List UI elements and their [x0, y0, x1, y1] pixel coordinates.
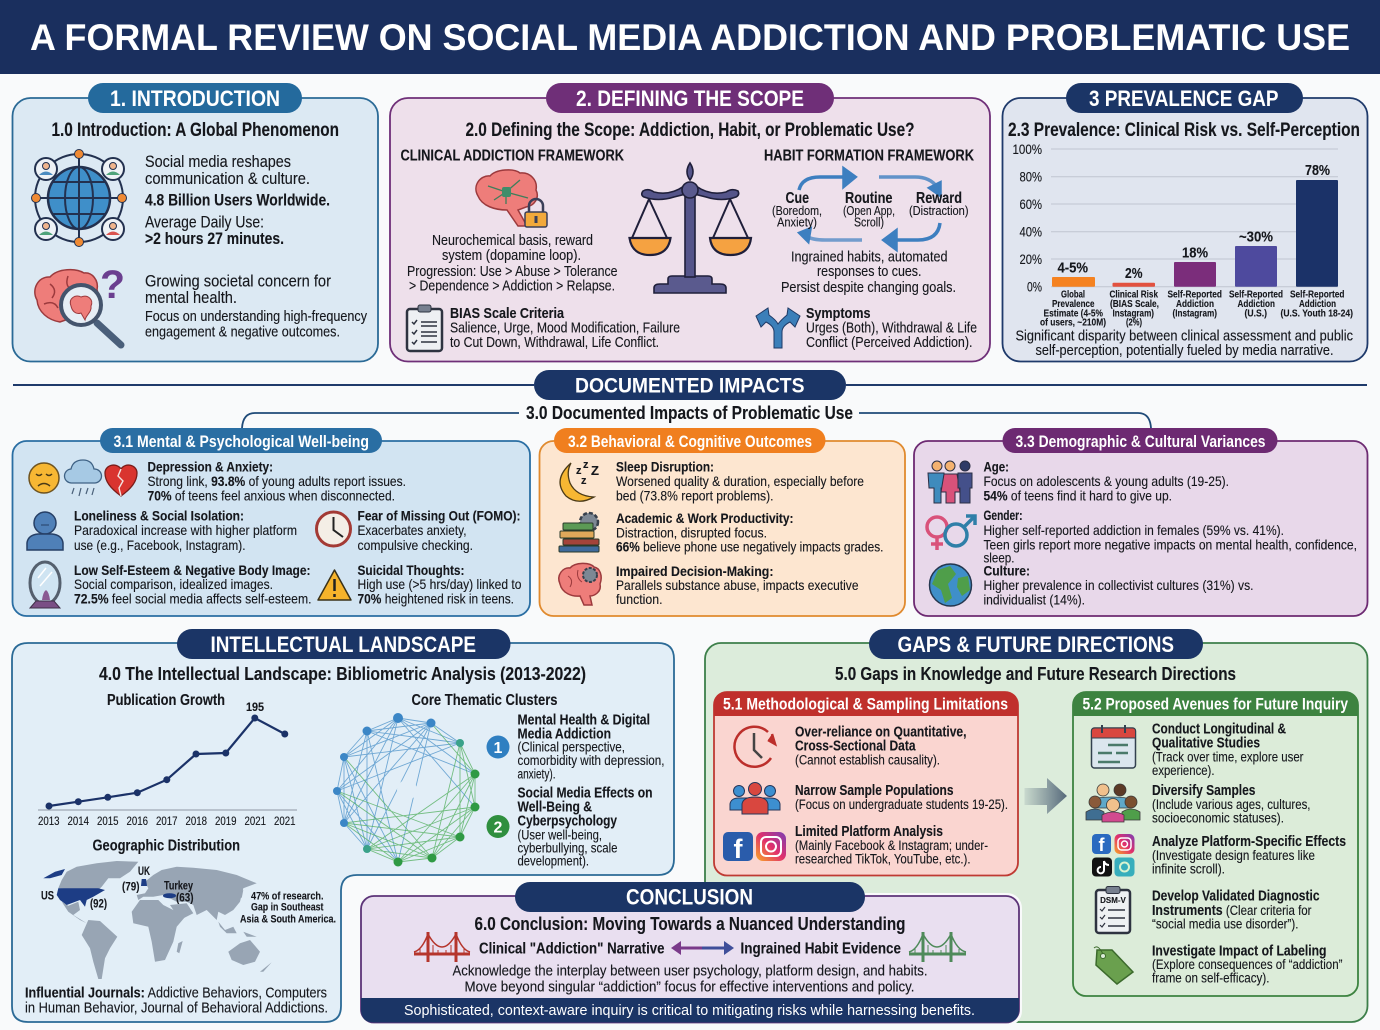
world map: geographic distribution: 47% of research. [251, 890, 324, 902]
text: age gender culture: Age: [984, 458, 1009, 474]
pill heading: intellectual landscape: INTELLECTUAL LANDSCAPE [210, 632, 476, 657]
text: diversify samples: Diversify Samples [1152, 783, 1256, 799]
text: over-reliance: Cross-Sectional Data [795, 738, 916, 754]
text: users and daily use: communication & culture. [145, 170, 310, 188]
heading: gaps in knowledge: 5.0 Gaps in Knowledge and Future Research Directions [835, 663, 1236, 684]
bar chart: prevalence: 78% [1305, 163, 1330, 179]
icon: moon and z's [560, 459, 599, 501]
text: clinical addiction narrative: Clinical "Addiction" Narrative [479, 940, 665, 958]
text: cluster 2: development). [518, 854, 589, 868]
banner: closing statement [361, 998, 1019, 1022]
heading: documented impacts of problematic use: 3.0 Documented Impacts of Problematic Use [526, 403, 853, 423]
world map: geographic distribution: (63) [176, 892, 194, 904]
line chart: publication growth: 2021 [274, 816, 296, 828]
icon: moon and z's: z [583, 459, 589, 471]
text: societal concern: mental health. [145, 289, 237, 307]
text: cluster 1: Mental Health & Digital [518, 712, 650, 728]
text: impact of labeling: (Explore consequences of “addiction” [1152, 957, 1342, 972]
bar chart: prevalence: Addiction [1299, 298, 1336, 310]
text: cluster 2 [518, 786, 652, 868]
world map: geographic distribution: (92) [90, 898, 107, 910]
text: diagnostic instruments: Develop Validated Diagnostic [1152, 888, 1320, 904]
banner: closing statement: Sophisticated, context-aware inquiry is critical to mitigating risks while harnessing benefits. [404, 1002, 975, 1019]
icon: three people [928, 461, 972, 503]
header: 5.1 [714, 692, 1018, 716]
bar chart: prevalence: Self-Reported [1229, 289, 1283, 301]
badge: cluster 2: 2 [494, 820, 503, 836]
line chart: publication growth: 2015 [97, 816, 118, 828]
badge: cluster 1 [486, 736, 510, 758]
text: longitudinal [1152, 722, 1304, 778]
bar chart: prevalence: Self-Reported [1290, 289, 1344, 301]
panel: defining the scope [390, 83, 990, 362]
text: behavioral outcomes: Sleep Disruption: [616, 458, 714, 474]
text: loneliness: use (e.g., Facebook, Instagram). [74, 537, 246, 553]
icon: broken heart [105, 465, 137, 496]
text: users and daily use: 4.8 Billion Users Worldwide. [145, 192, 330, 210]
line chart: publication growth: 2017 [156, 816, 178, 828]
icon: lonely person [27, 512, 63, 550]
bar chart: prevalence: 60% [1020, 197, 1042, 212]
arrow: double-headed narrative to evidence [671, 941, 734, 955]
text: ingrained habit evidence: Ingrained Habit Evidence [740, 940, 901, 958]
text: narrow sample: (Focus on undergraduate students 19-25). [795, 797, 1008, 812]
text: loneliness: Loneliness & Social Isolation: [74, 508, 244, 524]
icon: diverse group [1086, 784, 1140, 822]
pill heading: 3.3 [1002, 428, 1278, 453]
text: cluster 1: comorbidity with depression, [518, 753, 664, 768]
pill heading: documented impacts [534, 370, 846, 400]
bar chart: prevalence: Clinical Risk [1110, 289, 1158, 301]
text: behavioral outcomes: Distraction, disrupted focus. [616, 524, 767, 540]
text: cluster 1: Media Addiction [518, 726, 611, 742]
bar chart: prevalence: 80% [1020, 170, 1042, 184]
text: symptoms: Conflict (Perceived Addiction). [806, 335, 972, 351]
title banner [0, 0, 1380, 74]
text: fomo: Fear of Missing Out (FOMO): [358, 508, 520, 524]
icon: group of people [730, 782, 780, 814]
bar chart: prevalence: 40% [1020, 224, 1042, 240]
text: users and daily use [145, 153, 330, 248]
text: self-esteem: 72.5% feel social media affects self-esteem. [74, 590, 312, 606]
bar chart: prevalence: 18% [1182, 246, 1208, 262]
bar chart: prevalence: of users, ~210M) [1040, 317, 1106, 329]
text: clinical framework description: system (dopamine loop). [442, 248, 581, 264]
text: conclusion body: Move beyond singular “addiction” focus for effective interventions and policy. [464, 980, 914, 996]
text: cluster 2: (User well-being, [518, 828, 602, 842]
heading: clinical addiction framework: CLINICAL ADDICTION FRAMEWORK [400, 148, 625, 164]
text: impact of labeling: frame on self-efficacy). [1152, 970, 1270, 986]
icon: mirror [30, 562, 60, 608]
text: diagnostic instruments: Instruments (Clear criteria for [1152, 903, 1312, 919]
bar chart: prevalence: (BIAS Scale, [1110, 298, 1159, 310]
text: self-esteem: Social comparison, idealized images. [74, 576, 273, 592]
icon: facebook [723, 832, 753, 864]
text: behavioral outcomes: Impaired Decision-Making: [616, 563, 774, 579]
heading: addiction habit problematic use: 2.0 Defining the Scope: Addiction, Habit, or Problematic Use? [466, 120, 914, 141]
bar chart: prevalence: (2%) [1126, 317, 1142, 329]
text: influential journals [25, 986, 328, 1016]
text: suicidal thoughts [358, 562, 522, 606]
text: cluster 1: anxiety). [518, 766, 556, 782]
icon: balance scale [630, 163, 751, 293]
panel: conclusion [358, 882, 1022, 1026]
text: cluster 2: Cyberpsychology [518, 814, 617, 830]
text: suicidal thoughts: Suicidal Thoughts: [358, 562, 464, 578]
pill heading: 1. introduction: 1. INTRODUCTION [110, 86, 280, 111]
icon: gender symbols [927, 516, 975, 550]
pill heading: 3.1: 3.1 Mental & Psychological Well-being [114, 433, 369, 451]
panel: gaps and future directions [705, 629, 1368, 1022]
icon: clock with return arrow [734, 727, 775, 767]
text: clinical framework description: > Dependence > Addiction > Relapse. [409, 278, 615, 294]
text: depression and anxiety: 70% of teens feel anxious when disconnected. [148, 488, 395, 504]
icon: moon and z's: z [581, 475, 587, 487]
pill heading: conclusion [515, 882, 865, 912]
text: fomo [358, 508, 520, 553]
heading: nuanced understanding: 6.0 Conclusion: Moving Towards a Nuanced Understanding [474, 913, 906, 934]
text: cue routine reward: (Distraction) [909, 204, 968, 218]
icon: brain with gear [559, 563, 601, 605]
text: behavioral outcomes: Worsened quality & duration, especially before [616, 473, 864, 489]
text: clinical framework description [407, 233, 618, 294]
text: diversify samples: (Include various ages, cultures, [1152, 797, 1310, 812]
bar chart: prevalence: (Instagram) [1172, 307, 1217, 319]
bar chart: prevalence: (U.S.) [1244, 307, 1267, 319]
text: over-reliance [795, 724, 966, 768]
text: bias scale criteria: to Cut Down, Withdrawal, Life Conflict. [450, 335, 659, 351]
text: symptoms: Symptoms [806, 305, 870, 322]
text: societal concern: Growing societal concern for [145, 272, 331, 290]
text: impact of labeling: Investigate Impact of Labeling [1152, 944, 1326, 960]
text: habit description [781, 250, 956, 296]
bar chart: prevalence: Addiction [1238, 298, 1275, 310]
line chart: publication growth [38, 692, 297, 828]
line chart: publication growth: 2013 [38, 816, 60, 828]
text: conclusion body: Acknowledge the interplay between user psychology, platform design, and habits. [452, 964, 928, 980]
text: cue routine reward: Anxiety) [777, 216, 817, 230]
world map: geographic distribution: Gap in Southeast [251, 902, 324, 914]
text: cluster 2: Well-Being & [518, 800, 592, 816]
heading: geographic distribution: Geographic Distribution [92, 838, 240, 854]
pill heading: 3.1 [100, 428, 382, 453]
text: cue routine reward: Routine [845, 190, 893, 207]
arrow: limitations to avenues [1024, 778, 1067, 814]
icon: tag [1094, 947, 1133, 984]
icon: brain under magnifier with question mark: ? [100, 263, 125, 307]
icon: moon and z's: z [576, 465, 582, 477]
icon: platform apps: f [1098, 835, 1106, 855]
text: depression and anxiety [148, 458, 406, 504]
icon: earth [930, 564, 972, 606]
text: impact of labeling [1152, 944, 1342, 986]
bar chart: prevalence: 20% [1020, 252, 1042, 267]
text: diversify samples [1152, 783, 1310, 826]
panel: mental and psychological well-being [12, 428, 530, 616]
icon: calendar with arrows [1092, 725, 1136, 768]
text: loneliness [74, 508, 297, 553]
text: narrow sample: Narrow Sample Populations [795, 783, 954, 799]
panel: prevalence gap [1002, 83, 1368, 362]
bar chart: prevalence: 4-5% [1058, 260, 1088, 276]
text: bias scale criteria: BIAS Scale Criteria [450, 305, 565, 322]
text: longitudinal: Qualitative Studies [1152, 736, 1260, 752]
bar chart: prevalence: Instagram) [1112, 307, 1154, 319]
text: age gender culture: Focus on adolescents & young adults (19-25). [984, 473, 1229, 489]
text: age gender culture: individualist (14%). [984, 592, 1085, 608]
text: diagnostic instruments: “social media use disorder”). [1152, 916, 1298, 932]
text: societal concern: engagement & negative outcomes. [145, 324, 340, 340]
text: societal concern: Focus on understanding high-frequency [145, 309, 368, 325]
line chart: publication growth: 195 [246, 702, 265, 714]
world map: geographic distribution: Asia & South America. [240, 913, 336, 925]
bar chart: prevalence: 100% [1012, 142, 1042, 157]
pill heading: conclusion: CONCLUSION [626, 884, 753, 910]
text: behavioral outcomes: bed (73.8% report problems). [616, 488, 774, 504]
heading: habit formation framework: HABIT FORMATION FRAMEWORK [764, 148, 975, 164]
text: cue routine reward: (Open App, [843, 204, 895, 218]
text: users and daily use: Social media reshapes [145, 153, 291, 171]
text: cluster 2: Social Media Effects on [518, 786, 652, 802]
text: societal concern [145, 272, 368, 340]
text: platform-specific effects: Analyze Platform-Specific Effects [1152, 834, 1346, 850]
panel: behavioral and cognitive outcomes [540, 428, 905, 616]
icon: split arrow [756, 308, 800, 348]
pill heading: gaps and future directions: GAPS & FUTURE DIRECTIONS [898, 632, 1174, 657]
icon: clipboard checklist [407, 305, 442, 351]
text: longitudinal: (Track over time, explore user [1152, 750, 1304, 764]
panel: introduction [12, 83, 378, 362]
text: symptoms: Urges (Both), Withdrawal & Life [806, 320, 977, 336]
text: cluster 1 [518, 712, 664, 782]
text: loneliness: Paradoxical increase with higher platform [74, 522, 297, 538]
bar chart: prevalence: Global [1061, 289, 1085, 301]
text: habit description: Ingrained habits, automated [791, 250, 948, 266]
text: conclusion body [452, 964, 928, 996]
line chart: publication growth: 2016 [126, 816, 148, 828]
icon: green bridge [909, 932, 966, 962]
text: users and daily use: >2 hours 27 minutes. [145, 230, 284, 248]
bar chart: prevalence: Self-Reported [1168, 289, 1222, 301]
text: behavioral outcomes: function. [616, 591, 662, 607]
header: 5.2 [1073, 692, 1358, 716]
text: age gender culture: Culture: [984, 562, 1030, 578]
pill heading: 3.2: 3.2 Behavioral & Cognitive Outcomes [568, 433, 812, 451]
pill heading: defining the scope: 2. DEFINING THE SCOPE [576, 86, 804, 111]
text: diagnostic instruments [1152, 888, 1320, 932]
text: symptoms [806, 305, 977, 351]
text: depression and anxiety: Depression & Anxiety: [148, 458, 273, 474]
text: cue routine reward: Cue [786, 190, 809, 207]
icon: dsm-v clipboard: DSM-V [1100, 896, 1127, 905]
panel: methodological and sampling limitations [714, 692, 1018, 876]
text: clinical framework description: Progression: Use > Abuse > Tolerance [407, 264, 618, 280]
heading: core thematic clusters: Core Thematic Clusters [412, 692, 558, 709]
pill heading: documented impacts: DOCUMENTED IMPACTS [575, 374, 804, 398]
text: age gender culture: Higher prevalence in collectivist cultures (31%) vs. [984, 577, 1254, 593]
text: behavioral outcomes: Academic & Work Productivity: [616, 510, 794, 526]
icon: warning triangle [318, 570, 351, 600]
text: diversify samples: socioeconomic statuses). [1152, 810, 1284, 826]
icon: moon and z's: Z [591, 463, 599, 478]
text: cue routine reward: (Boredom, [772, 204, 822, 218]
bar chart: prevalence: Estimate (4-5% [1044, 307, 1104, 319]
text: influential journals: Influential Journals: Addictive Behaviors, Computers [25, 986, 327, 1002]
text: influential journals: in Human Behavior, Journal of Behavioral Addictions. [25, 1000, 328, 1016]
line chart: publication growth: 2019 [215, 816, 236, 828]
text: disparity takeaway: self-perception, potentially fueled by media narrative. [1036, 343, 1334, 359]
text: longitudinal: Conduct Longitudinal & [1152, 722, 1286, 738]
text: limited platform: researched TikTok, YouTube, etc.). [795, 852, 970, 866]
world map: geographic distribution: (79) [122, 882, 140, 894]
text: cluster 1: (Clinical perspective, [518, 740, 625, 754]
badge: cluster 2 [486, 815, 510, 838]
text: age gender culture: Gender: [984, 507, 1022, 523]
pill heading: prevalence gap: 3 PREVALENCE GAP [1089, 86, 1278, 111]
text: limited platform: Limited Platform Analysis [795, 824, 943, 840]
text: disparity takeaway [1016, 328, 1353, 359]
text: habit description: responses to cues. [817, 264, 922, 280]
icon: red bridge [414, 932, 470, 962]
bar chart: prevalence [1012, 142, 1353, 329]
pill heading: 3.3: 3.3 Demographic & Cultural Variances [1016, 433, 1266, 451]
text: cue routine reward: Reward [916, 190, 962, 207]
header: 5.1: 5.1 Methodological & Sampling Limitations [723, 696, 1008, 714]
bar chart: prevalence: Prevalence [1052, 298, 1095, 310]
panel: proposed avenues [1073, 692, 1358, 996]
icon: brain under magnifier with question mark [35, 263, 125, 345]
text: cue routine reward [772, 190, 968, 230]
icon: rain cloud [64, 460, 102, 496]
text: behavioral outcomes: 66% believe phone use negatively impacts grades. [616, 538, 884, 554]
line chart: publication growth: Publication Growth [107, 692, 225, 709]
text: suicidal thoughts: 70% heightened risk in teens. [358, 590, 514, 606]
icon: networked globe [32, 150, 126, 246]
pill heading: 3.2 [554, 428, 826, 453]
text: over-reliance: (Cannot establish causality). [795, 752, 940, 768]
heading: global phenomenon: 1.0 Introduction: A Global Phenomenon [52, 120, 339, 141]
text: self-esteem: Low Self-Esteem & Negative Body Image: [74, 562, 310, 578]
text: limited platform [795, 824, 988, 866]
text: over-reliance: Over-reliance on Quantitative, [795, 724, 966, 740]
icon: brain with lock [476, 170, 547, 227]
network diagram: thematic clusters [333, 713, 480, 866]
text: narrow sample [795, 783, 1008, 812]
line chart: publication growth: 2014 [68, 816, 89, 828]
bar chart: prevalence: Addiction [1176, 298, 1214, 310]
text: longitudinal: experience). [1152, 763, 1214, 778]
text: fomo: compulsive checking. [358, 537, 473, 553]
heading: bibliometric analysis: 4.0 The Intellectual Landscape: Bibliometric Analysis (2013-2022) [99, 663, 586, 684]
world map: geographic distribution: UK [138, 866, 150, 878]
bar chart: prevalence: ~30% [1239, 230, 1273, 246]
text: fomo: Exacerbates anxiety, [358, 522, 466, 538]
bar chart: prevalence: 2% [1125, 266, 1143, 282]
text: age gender culture: 54% of teens find it hard to give up. [984, 488, 1172, 504]
text: behavioral outcomes: Parallels substance abuse, impacts executive [616, 577, 859, 593]
text: habit description: Persist despite changing goals. [781, 280, 956, 296]
text: self-esteem [74, 562, 312, 606]
text: age gender culture: Higher self-reported addiction in females (59% vs. 41%). [984, 522, 1284, 538]
world map: geographic distribution [41, 861, 336, 979]
icon: sad face [29, 463, 59, 493]
text: behavioral outcomes [616, 458, 884, 607]
text: bias scale criteria: Salience, Urge, Mood Modification, Failure [450, 320, 680, 336]
text: suicidal thoughts: High use (>5 hrs/day) linked to [358, 576, 522, 592]
text: platform-specific effects [1152, 834, 1346, 876]
text: bias scale criteria [450, 305, 680, 351]
panel: demographic and cultural variances [914, 428, 1368, 616]
text: cluster 2: cyberbullying, scale [518, 840, 618, 856]
icon: books and gear [559, 513, 599, 552]
text: platform-specific effects: (Investigate design features like [1152, 848, 1315, 863]
icon: clock [316, 512, 350, 546]
bar chart: prevalence: (U.S. Youth 18-24) [1280, 307, 1353, 319]
icon: facebook: f [734, 834, 744, 864]
text: age gender culture [984, 458, 1357, 608]
title banner: A FORMAL REVIEW ON SOCIAL MEDIA ADDICTION AND PROBLEMATIC USE [30, 17, 1350, 58]
line chart: publication growth: 2021 [244, 816, 266, 828]
text: users and daily use: Average Daily Use: [145, 214, 264, 232]
text: limited platform: (Mainly Facebook & Instagram; under- [795, 838, 988, 853]
text: cue routine reward: Scroll) [854, 216, 884, 230]
badge: cluster 1: 1 [494, 740, 503, 757]
text: depression and anxiety: Strong link, 93.8% of young adults report issues. [148, 473, 406, 489]
text: platform-specific effects: infinite scroll). [1152, 862, 1225, 876]
line chart: publication growth: 2018 [186, 816, 207, 828]
icon: instagram [756, 832, 786, 861]
icon: dsm-v clipboard [1096, 886, 1130, 933]
text: age gender culture: sleep. [984, 550, 1014, 566]
icon: habit loop arrows [799, 169, 940, 249]
world map: geographic distribution: US [41, 890, 54, 902]
world map: geographic distribution: Turkey [164, 880, 193, 892]
bar chart: prevalence: 0% [1027, 280, 1042, 294]
icon: platform apps [1092, 834, 1134, 876]
text: clinical framework description: Neurochemical basis, reward [432, 233, 593, 249]
panel: intellectual landscape [12, 629, 674, 1022]
